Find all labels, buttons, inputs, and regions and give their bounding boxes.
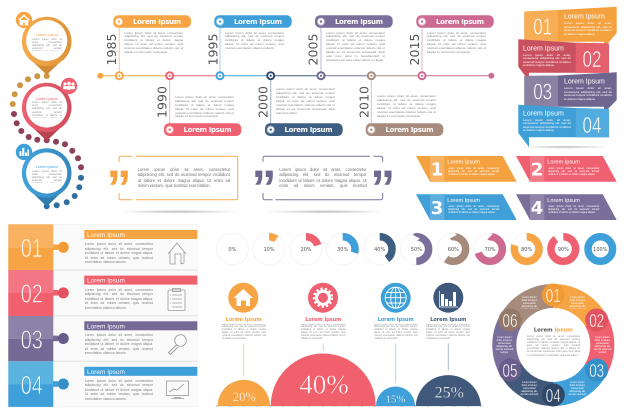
column 15%: 15% [385,393,406,405]
axis [217,405,482,407]
donut 50%: 50% [411,247,422,253]
quote mark: ” [106,160,132,216]
row 03: Lorem ipsum dolor sit amet, consectetur adipisicing elit, sed do eiusmod tempor incididunt ut labore et dolore magna aliqua. Ut enim ad minim veniam, quis nostrud exercitation ullamco laboris. [85,333,153,355]
2005 milestone: Lorem Ipsum [335,18,383,26]
box 03 [524,72,617,113]
column 20% [218,283,270,406]
donut 0% [216,233,248,265]
donut 60% [437,233,469,265]
banner 4: 4 [531,198,543,219]
pin 1 [16,12,72,75]
banner 2 [516,156,617,182]
row 04: Lorem Ipsum [87,369,125,376]
donut 40% [364,233,396,265]
donut 10% [253,233,285,265]
box 03: 03 [533,78,552,104]
row 03: 03 [21,324,43,354]
donut 40%: 40% [374,247,385,253]
1990 milestone: Lorem Ipsum [184,126,232,134]
banner 1: Lorem Ipsum [447,160,480,166]
pin 3: Lorem Ipsum [36,165,58,169]
donut 60%: 60% [448,247,459,253]
donut 30% [327,233,359,265]
2010 milestone: 2010 [356,86,371,118]
2000 milestone: 2000 [256,86,271,118]
row 01: Lorem Ipsum [87,232,125,239]
banner 3 [416,194,517,220]
box shadow [520,145,610,149]
row 04: Lorem ipsum dolor sit amet, consectetur adipisicing elit, sed do eiusmod tempor incididunt ut labore et dolore magna aliqua. Ut enim ad minim veniam, quis nostrud exercitation ullamco laboris. [85,379,153,401]
icon: home [16,12,32,28]
banner 4 [516,194,617,220]
panel: quote box purple [252,156,395,216]
box 01: Lorem Ipsum [564,14,605,20]
ring center text: Lorem ipsum dolor sit amet, consectetur adipisicing elit, sed do eiusmod tempor incididunt ut labore et dolore magna aliqua. Ut enim ad minim veniam, quis nostrud exercitation ullamco laboris nisi ut aliquip ex ea commodo consequat. Duis aute irure dolor in reprehenderit in voluptate velit esse cillum. [527,335,580,357]
box 01: 01 [533,14,552,40]
column 20%: Lorem Ipsum [226,317,262,323]
icon: house [168,243,186,264]
2015 milestone: 2015 [407,34,422,66]
1995 milestone: Lorem Ipsum [234,18,282,26]
banner 1: 1 [431,160,443,180]
1985 milestone [104,15,191,79]
donut 50% [400,233,432,265]
column 15% [374,283,418,406]
column 25%: Lorem Ipsum [430,317,466,323]
dotted path [10,73,84,209]
ring center text [527,328,580,359]
quote mark right: ” [370,160,395,216]
1985 milestone: Lorem Ipsum [133,18,181,26]
box 03: Lorem Ipsum [564,78,605,86]
banner 3: Lorem Ipsum [447,198,480,204]
number badges: 01 [546,286,561,306]
2015 milestone [407,15,494,79]
donut 80%: 80% [521,247,532,253]
pin 2 [22,78,77,141]
column 20%: 20% [233,390,256,404]
donut 90%: 90% [558,247,569,253]
1990 milestone [155,72,241,136]
panel: percentage donuts [216,233,613,265]
panel: quote box orange: Lorem ipsum dolor sit amet, consectetur adipisicing elit, sed do eiusmod tempor incididunt ut labore et dolore magna aliqua. Ut enim ad minim veniam, quis nostrud exercitation. [138,167,230,188]
timeline axis [97,27,494,124]
icon: monitor [166,381,188,398]
number badges: 03 [589,361,604,381]
row 02: 02 [21,279,43,309]
column 40%: 40% [299,370,349,400]
number badges: 05 [502,361,518,381]
box 02: Lorem Ipsum [523,46,564,52]
donut 70%: 70% [484,247,496,253]
pin 2: Lorem Ipsum [36,97,58,101]
icon: bar chart [16,144,32,160]
1990 milestone: 1990 [155,86,170,118]
icon: clipboard [168,288,185,310]
banner 2: Lorem ipsum dolor sit amet, consectetur adipisicing elit, sed do eiusmod tempor incididunt ut labore et dolore magna aliqua. [548,166,600,176]
panel: numbered speech boxes [518,7,617,149]
donut 20% [290,233,322,265]
pin 3 [16,144,72,206]
icon: magnifier [168,335,186,354]
banner 2: 2 [531,160,543,180]
row 02: Lorem ipsum dolor sit amet, consectetur adipisicing elit, sed do eiusmod tempor incididunt ut labore et dolore magna aliqua. Ut enim ad minim veniam, quis nostrud exercitation ullamco laboris. [85,288,153,310]
1995 milestone: 1995 [205,34,220,66]
banner 4: Lorem ipsum dolor sit amet, consectetur adipisicing elit, sed do eiusmod tempor incididunt ut labore et dolore magna aliqua. [548,205,600,214]
column 40%: Lorem Ipsum [305,317,341,323]
number badges: 04 [546,386,561,406]
donut 20%: 20% [300,247,312,253]
banner 1: Lorem ipsum dolor sit amet, consectetur adipisicing elit, sed do eiusmod tempor incididunt ut labore et dolore magna aliqua. [448,166,500,176]
segment captions [495,296,612,395]
2010 milestone [356,72,443,136]
panel: quote box orange [106,156,241,216]
row 04 [8,361,197,407]
number badges: 02 [589,311,604,331]
panel: pin diagram [10,12,84,209]
row 04: 04 [21,370,43,400]
donut 70% [474,233,506,265]
box 04 [518,105,609,147]
banner 1 [416,156,517,182]
column 25% [416,283,481,406]
2015 milestone: Lorem Ipsum [436,18,484,26]
number badges: 06 [502,311,518,331]
row 03 [8,316,197,361]
column 25%: 25% [435,385,464,402]
icon: people [61,78,77,94]
row 01: 01 [21,233,43,263]
row 02 [8,270,197,316]
column 40% [271,283,376,406]
panel: timeline [97,15,494,136]
panel: puzzle list [8,224,197,407]
box 04: Lorem Ipsum [523,110,564,118]
ring center text: Lorem Ipsum [534,328,573,334]
donut 10%: 10% [263,247,275,253]
box 02 [518,39,609,81]
2005 milestone: 2005 [305,34,320,66]
1995 milestone [205,15,292,79]
number badges [498,284,608,406]
1985 milestone: 1985 [104,34,119,66]
donut 0%: 0% [228,247,237,253]
box 04: 04 [582,112,602,138]
column 15%: Lorem Ipsum [378,317,414,323]
quote mark left: ” [252,160,276,216]
row 01: Lorem ipsum dolor sit amet, consectetur adipisicing elit, sed do eiusmod tempor incididunt ut labore et dolore magna aliqua. Ut enim ad minim veniam, quis nostrud exercitation ullamco laboris. [85,242,153,264]
donut 100%: 100% [593,247,608,253]
box 01 [524,7,617,48]
2010 milestone: Lorem Ipsum [386,126,434,134]
banner 3: 3 [431,198,443,219]
banner 3: Lorem ipsum dolor sit amet, consectetur adipisicing elit, sed do eiusmod tempor incididunt ut labore et dolore magna aliqua. [448,205,500,214]
panel: ring diagram [486,278,620,412]
donut 80% [511,233,543,265]
row 03: Lorem Ipsum [87,323,125,330]
donut 100% [588,237,613,261]
2000 milestone: Lorem Ipsum [284,126,332,134]
panel: numbered banners [416,156,617,220]
banner 4: Lorem Ipsum [547,198,580,204]
box 02: 02 [582,46,602,72]
row 02: Lorem Ipsum [87,278,125,285]
panel: semicircle chart [217,283,482,406]
ring segments [486,278,620,412]
banner 2: Lorem Ipsum [547,160,580,166]
row 01 [8,224,197,270]
2005 milestone [305,15,393,79]
pin 1: Lorem Ipsum [36,33,58,37]
donut 90% [547,233,579,265]
2000 milestone [256,72,343,136]
donut 30%: 30% [337,247,348,253]
